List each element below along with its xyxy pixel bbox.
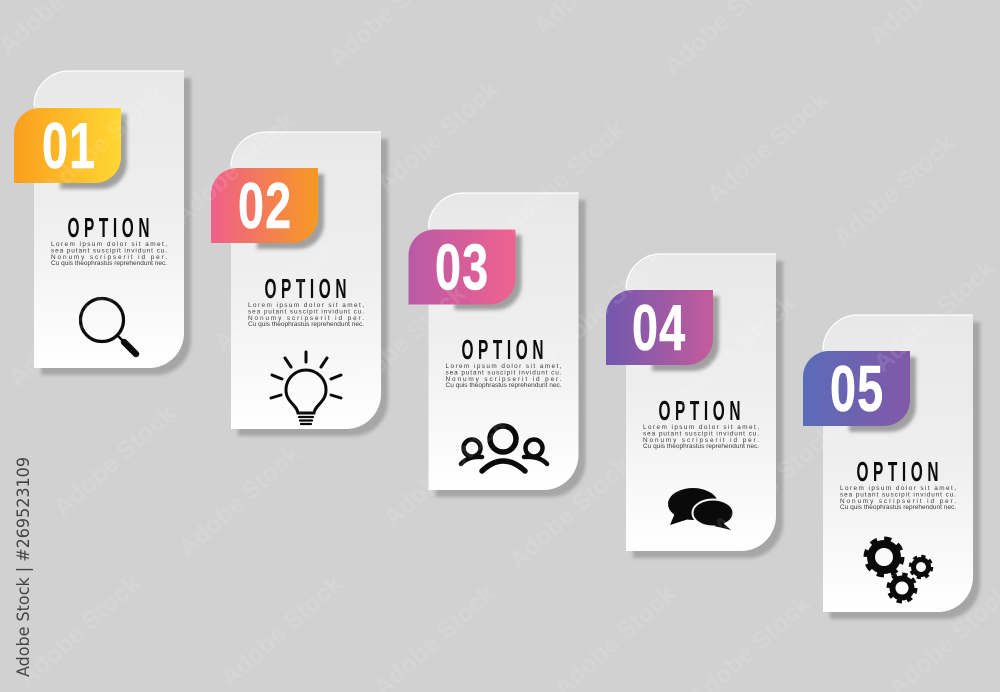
card 3: 03	[435, 232, 489, 304]
card 3: Lorem ipsum dolor sit amet,	[446, 363, 562, 370]
stock id text: Adobe Stock | #269523109	[14, 457, 34, 677]
card 4: Cu quis theophrastus reprehendunt nec.	[643, 443, 759, 450]
watermarks: Adobe Stock	[538, 244, 671, 367]
card 2: Lorem ipsum dolor sit amet,	[248, 302, 364, 309]
card 4: Lorem ipsum dolor sit amet,	[643, 424, 759, 431]
watermarks: Adobe Stock	[708, 419, 841, 542]
card 5: sea putant suscipit invidunt cu.	[840, 492, 956, 498]
icon: gears	[866, 539, 932, 602]
card 5: Lorem ipsum dolor sit amet,	[840, 485, 956, 492]
card 2: 02	[238, 171, 292, 243]
card 3: Nonumy scripserit id per.	[446, 376, 562, 383]
card 2: Cu quis theophrastus reprehendunt nec.	[248, 321, 364, 328]
watermarks: Adobe Stock	[498, 115, 631, 238]
watermarks: Adobe Stock	[828, 129, 961, 252]
watermarks: Adobe Stock	[208, 234, 341, 357]
card 5: 05	[830, 354, 884, 426]
watermarks: Adobe Stock	[868, 254, 1000, 377]
card 2: Nonumy scripserit id per.	[248, 315, 364, 322]
card 1: Nonumy scripserit id per.	[51, 254, 167, 261]
watermarks: Adobe Stock	[371, 75, 504, 198]
card 4: 04	[632, 293, 686, 365]
icon: people group	[461, 426, 547, 471]
watermarks: Adobe Stock	[668, 289, 801, 412]
card 5: OPTION	[856, 456, 943, 487]
card 1: 01	[42, 111, 96, 183]
card 2: sea putant suscipit invidunt cu.	[248, 308, 364, 316]
card 3	[408, 193, 586, 497]
card 4: OPTION	[658, 395, 745, 426]
watermarks: Adobe Stock	[13, 569, 146, 692]
card 4: sea putant suscipit invidunt cu.	[643, 430, 759, 438]
card 4: Nonumy scripserit id per.	[643, 437, 759, 444]
card 5: Cu quis theophrastus reprehendunt nec.	[840, 504, 956, 511]
icon: magnifier	[80, 298, 136, 354]
card 2: OPTION	[264, 273, 351, 304]
watermarks: Adobe Stock	[48, 399, 181, 522]
watermarks: Adobe Stock	[168, 107, 301, 230]
card 1: OPTION	[68, 212, 154, 243]
card 1	[14, 71, 191, 375]
card 1: Cu quis theophrastus reprehendunt nec.	[51, 260, 167, 267]
card 4	[606, 254, 783, 558]
watermarks: Adobe Stock	[3, 269, 136, 392]
card 1: sea putant suscipit invidunt cu.	[51, 248, 167, 254]
watermarks: Adobe Stock	[338, 279, 471, 402]
watermarks: Adobe Stock	[701, 85, 834, 208]
icon: light bulb	[271, 352, 341, 424]
card 3: Cu quis theophrastus reprehendunt nec.	[446, 382, 562, 389]
card 1: Lorem ipsum dolor sit amet,	[51, 241, 167, 248]
icon: chat bubbles	[668, 488, 734, 530]
watermarks: Adobe Stock	[215, 569, 348, 692]
watermarks: Adobe Stock	[378, 409, 511, 532]
card 5	[803, 315, 980, 619]
card 5: Nonumy scripserit id per.	[840, 498, 956, 505]
card 3: OPTION	[462, 334, 548, 365]
card 3: sea putant suscipit invidunt cu.	[446, 370, 562, 376]
watermarks: Adobe Stock	[503, 451, 636, 574]
card 2	[211, 132, 388, 436]
watermarks: Adobe Stock	[38, 79, 171, 202]
watermarks: Adobe Stock	[173, 439, 306, 562]
